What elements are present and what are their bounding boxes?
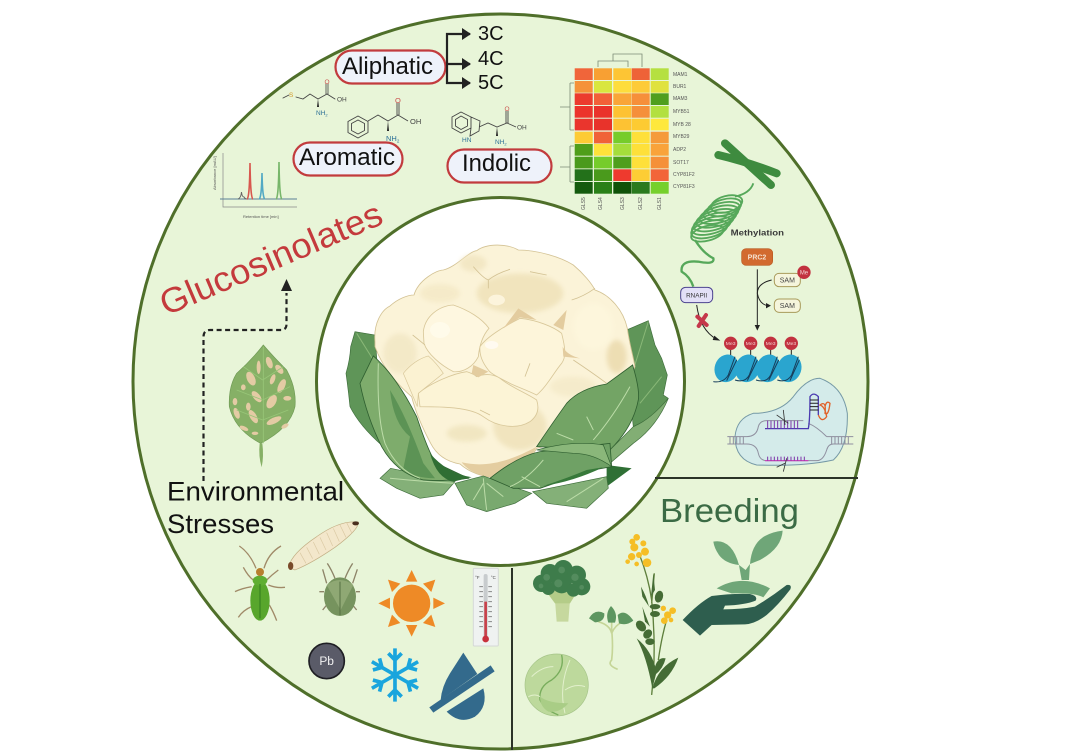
SAM cycle: Me	[800, 271, 809, 277]
icon: lead Pb	[309, 643, 344, 679]
icon: mustard plant	[625, 534, 678, 695]
inner white circle	[316, 198, 684, 566]
illustration: cauliflower	[346, 245, 668, 512]
icon: larva	[288, 521, 359, 570]
gene labels: BUR1	[673, 84, 687, 90]
nucleosomes with Me3 marks: Me3	[766, 341, 776, 347]
icon: lead Pb: Pb	[319, 654, 334, 668]
SAM cycle: SAM	[780, 303, 795, 310]
label: Aromatic: Aromatic	[299, 144, 395, 171]
heading: Glucosinolates: Glucosinolates	[154, 194, 388, 323]
label: Methylation: Methylation	[731, 227, 784, 237]
chemical structure: tryptophan: 2	[504, 142, 507, 146]
arrow: blocked RNAPII with red cross	[697, 305, 720, 341]
sample labels: GLS1	[657, 197, 663, 210]
text: Environmental Stresses	[167, 476, 344, 539]
SAM cycle: SAM	[780, 277, 795, 284]
chemical structure: phenylalanine: NH	[386, 134, 397, 143]
panel: aromatic class	[294, 96, 421, 176]
icon: CRISPR complex	[727, 378, 853, 472]
chemical structure: tryptophan: HN	[462, 137, 472, 144]
gene labels: MYB 28	[673, 122, 691, 128]
chemical structure: methionine: 2	[325, 112, 328, 118]
sample labels: GLS3	[620, 197, 626, 210]
heatmap cells	[575, 68, 669, 194]
back leaves	[346, 321, 668, 487]
chemical structure: tryptophan: OH	[517, 124, 527, 132]
icon: seedling	[589, 606, 633, 669]
curd	[375, 245, 635, 477]
dendrograms	[560, 54, 642, 182]
chart: chromatogram: Absorbance [mAU]	[212, 156, 217, 190]
box: PRC2: PRC2	[748, 254, 766, 261]
arrows: branching to carbon lengths	[447, 28, 471, 89]
box: PRC2	[742, 249, 773, 265]
gene labels: CYP81F3	[673, 184, 695, 190]
icon: thermometer: °C	[491, 575, 496, 580]
sample labels	[581, 197, 663, 210]
chemical structure: methionine: S	[289, 92, 294, 99]
chart: chromatogram	[212, 153, 297, 219]
box: RNAPII: RNAPII	[686, 292, 707, 299]
icon: green beetle	[235, 546, 285, 621]
icon: thermometer: °F	[475, 575, 480, 580]
label: Aliphatic	[336, 50, 446, 84]
gene labels: ADP2	[673, 147, 686, 153]
gene labels: MAM1	[673, 72, 688, 78]
icon: shield bug	[319, 563, 360, 616]
box: RNAPII	[681, 287, 713, 303]
gene labels: MYB29	[673, 134, 690, 140]
chemical structure: phenylalanine	[348, 96, 421, 144]
heading: Breeding: Breeding	[660, 492, 799, 529]
icon: chromatin coil	[682, 183, 753, 287]
panel: epigenetics and gene editing	[681, 143, 853, 472]
icon: sun	[378, 570, 445, 637]
icon: broccoli	[533, 560, 590, 622]
gene labels: SOT17	[673, 160, 689, 166]
chemical structure: tryptophan	[452, 106, 527, 146]
chemical structure: methionine	[283, 79, 347, 118]
gene labels	[673, 72, 695, 190]
chemical structure: methionine: OH	[337, 96, 347, 104]
text: Environmental Stresses: Stresses	[167, 509, 274, 539]
icon: thermometer	[473, 568, 498, 646]
panel: indolic class	[448, 106, 552, 182]
gene labels: MAM3	[673, 96, 688, 102]
arrow: dashed stress to glucosinolates	[204, 279, 292, 481]
chart: chromatogram: Retention time [min]	[243, 214, 279, 219]
gene labels: MYB51	[673, 109, 690, 115]
outer ring panel	[133, 14, 868, 749]
label: 5C: 5C	[478, 72, 504, 94]
chart: gene expression heatmap	[560, 54, 695, 210]
icon: chromosome	[718, 143, 777, 185]
icon: cabbage	[525, 654, 588, 716]
nucleosomes with Me3 marks: Me3	[726, 341, 736, 347]
nucleosomes with Me3 marks	[711, 337, 805, 385]
chemical structure: phenylalanine: OH	[410, 117, 421, 126]
arrow: PRC2 to nucleosomes	[755, 269, 760, 331]
panel: aliphatic class with chain lengths	[336, 23, 504, 94]
icon: snowflake	[369, 648, 421, 702]
gene labels: CYP81F2	[673, 172, 695, 178]
icon: stressed leaf	[229, 345, 295, 467]
label: Aliphatic: Aliphatic	[342, 53, 433, 80]
nucleosomes with Me3 marks: Me3	[746, 341, 756, 347]
icon: no water drop	[429, 653, 495, 720]
chemical structure: tryptophan: O	[504, 106, 510, 113]
sample labels: GLS2	[638, 197, 644, 210]
front leaves	[360, 356, 668, 512]
icon group: biotic stress insects	[235, 521, 360, 621]
SAM cycle	[757, 266, 811, 312]
sample labels: GLS5	[581, 197, 587, 210]
chemical structure: methionine: O	[324, 79, 330, 86]
icon: hand holding seedling	[683, 531, 791, 636]
chemical structure: tryptophan: NH	[495, 139, 504, 146]
chemical structure: phenylalanine: O	[395, 96, 401, 105]
chemical structure: methionine: NH	[316, 110, 325, 117]
label: Indolic: Indolic	[462, 150, 531, 177]
label: 4C: 4C	[478, 48, 504, 70]
sample labels: GLS4	[598, 197, 604, 210]
nucleosomes with Me3 marks: Me3	[786, 341, 796, 347]
label: 3C: 3C	[478, 23, 504, 45]
chemical structure: phenylalanine: 2	[397, 138, 400, 144]
text: Environmental Stresses: Environmental	[167, 476, 344, 506]
